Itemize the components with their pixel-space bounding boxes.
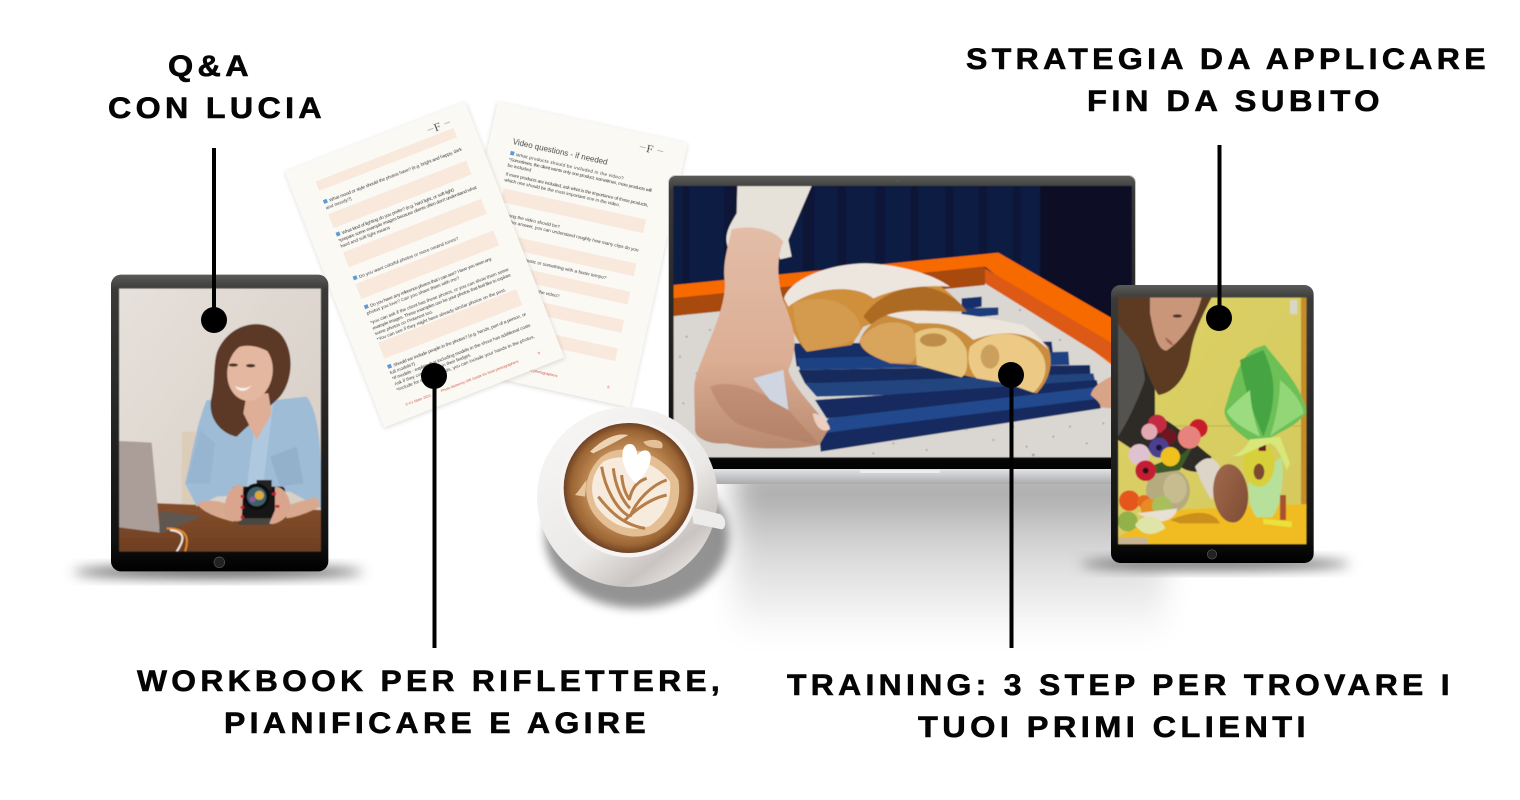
glove	[1195, 458, 1222, 500]
counter	[673, 282, 1127, 458]
page: photo questions: 5	[537, 351, 541, 356]
page: photo questions: some photos on Pinterest too.	[374, 309, 434, 336]
camera	[232, 487, 285, 518]
page: photo questions: hard and soft light means	[340, 225, 391, 249]
connector: workbook	[421, 363, 447, 648]
page: photo questions: Photo Alchemy Gift Guide for food photographers	[440, 359, 519, 393]
heading: workbook	[137, 665, 724, 740]
page: photo questions: What kind of lighting do you prefer? (e.g. hard light, or soft light)	[341, 187, 455, 235]
fruit	[1119, 490, 1140, 511]
shirt	[185, 397, 321, 508]
hand	[694, 228, 830, 449]
page: video questions: Video questions - if needed	[512, 137, 608, 167]
page: photo questions: What mood or style should the photos have? (e.g. bright and happy, dark	[328, 146, 463, 203]
sleeve	[726, 186, 812, 259]
page: video questions: What products should be included in the video?	[516, 152, 624, 181]
page: photo questions: Should we include people in the photos? (e.g. hands, part of a person, or	[393, 311, 527, 368]
back half donut	[784, 263, 967, 352]
page: video questions: Photo Alchemy Gift Guide for food photographers	[476, 356, 558, 378]
cup	[560, 419, 698, 557]
page: video questions: Are they relaxing music or something with a faster tempo?	[488, 250, 607, 280]
ribbon	[1232, 437, 1290, 470]
page: photo questions: Ask if they consider that in their budget.	[393, 352, 472, 387]
heading: training	[787, 669, 1454, 744]
tablet frame	[1111, 285, 1314, 563]
table	[1118, 504, 1307, 544]
connector: strategia	[1206, 145, 1232, 331]
page: photo questions: F	[432, 119, 443, 134]
neck	[243, 393, 272, 440]
table	[119, 502, 321, 552]
page: video questions: 6	[607, 385, 610, 390]
page: photo questions: *you can ask if the client has these photos, or you can show them some	[370, 267, 510, 325]
page: photo questions: and moody?)	[325, 196, 353, 210]
connector: Q&A	[201, 148, 227, 333]
left tablet shadow	[73, 566, 363, 578]
right tablet: strategy	[1111, 285, 1314, 563]
page: video questions: Do you want to caption the video or text?	[470, 334, 554, 357]
page: photo questions: *prepare some example images because clients often don't understand what	[338, 185, 478, 243]
right hand	[1090, 376, 1111, 409]
tray slats	[762, 297, 1101, 452]
laptop in photo	[119, 441, 160, 533]
page: video questions	[440, 102, 687, 407]
face	[1150, 297, 1202, 351]
cup shadow	[545, 465, 728, 608]
heading: strategia da applicare	[966, 43, 1490, 118]
page: video questions: be included	[507, 163, 532, 173]
screen photo: woman with camera	[119, 288, 321, 552]
page: photo questions: © FJ Stein 2021	[405, 393, 432, 407]
page: photo questions: photos you love? Can you share them with me?	[366, 275, 460, 316]
connector: training	[998, 362, 1024, 648]
saucer	[537, 407, 718, 587]
wrapped egg green paper	[1224, 345, 1307, 440]
page: video questions: Do you want something for the video?	[482, 277, 560, 299]
heading: strategia da applicare: STRATEGIA DA APPLICARE	[966, 43, 1490, 76]
hair	[1118, 297, 1212, 395]
person jacket	[1117, 350, 1212, 472]
page: photo questions: full models?)	[389, 361, 416, 375]
page: photo questions: *If models - explain that including models in the shoot has additional costs	[391, 322, 532, 381]
page: video questions: How long the video should be?	[497, 210, 561, 229]
cable	[167, 528, 187, 552]
laptop base	[668, 469, 1136, 484]
coffee	[564, 423, 694, 553]
front half donut	[859, 310, 1051, 393]
page: photo questions	[285, 102, 564, 427]
right tablet shadow	[1080, 558, 1350, 570]
page: video questions: which one should be the most important one in the video.	[504, 177, 621, 208]
page: photo questions: Do you have any reference photos that I can see? Have you seen any	[369, 256, 493, 308]
tablet frame	[111, 275, 328, 571]
page: video questions: need.	[494, 222, 507, 230]
page: video questions: If more products are included, ask what is the importance of those products,	[505, 171, 649, 208]
chocolate egg half	[1212, 464, 1249, 523]
heading: workbook: WORKBOOK PER RIFLETTERE,	[137, 665, 724, 698]
stems and flowers	[1129, 415, 1208, 481]
page: video questions: *Sometimes, the client wants only one product; sometimes, more products will	[508, 157, 652, 193]
page: video questions: Any other effects?	[476, 305, 514, 318]
heading: training: TUOI PRIMI CLIENTI	[918, 711, 1310, 744]
page: photo questions: *Include for example hands, you can include your hands in the photos.	[396, 334, 535, 392]
wrapped egg body	[1248, 457, 1283, 517]
egg label	[1243, 441, 1275, 487]
page: photo questions: Do you want colorful photos or more neutral tones?	[358, 236, 459, 279]
cup handle	[692, 507, 725, 529]
laptop shadow	[735, 470, 1165, 640]
heading: workbook: PIANIFICARE E AGIRE	[224, 707, 650, 740]
laptop screen photo: pastry on blue tray	[673, 186, 1133, 458]
coffee cup	[537, 407, 728, 608]
arms	[197, 501, 240, 522]
hands	[224, 485, 243, 521]
heading: Q&A con Lucia: CON LUCIA	[108, 92, 326, 125]
heading: training: TRAINING: 3 STEP PER TROVARE I	[787, 669, 1454, 702]
lipstick and lip balm	[1280, 495, 1286, 520]
heading: Q&A con Lucia	[108, 50, 326, 125]
latte art	[575, 434, 679, 537]
laptop body	[668, 176, 1136, 470]
page: video questions: F	[645, 141, 655, 156]
page: photo questions: *You can see if they might have already similar photos on the post.	[376, 287, 507, 342]
face	[226, 345, 274, 402]
heading: Q&A con Lucia: Q&A	[168, 50, 253, 83]
page: video questions: *From this answer, you can understand roughly how many clips do you	[495, 216, 639, 253]
page: video questions: Are there any highlights?	[468, 339, 520, 355]
heading: strategia da applicare: FIN DA SUBITO	[1087, 85, 1384, 118]
left tablet: Q&A with Lucia	[111, 275, 328, 571]
laptop	[668, 176, 1136, 484]
vase	[1146, 468, 1190, 513]
orange frame	[672, 252, 1111, 366]
hair	[211, 324, 291, 437]
page: photo questions: example images. These examples can be your photos that feel like to explore	[372, 272, 512, 331]
document pages: workbook	[285, 102, 687, 427]
screen photo: chocolate egg still life	[1118, 297, 1307, 544]
